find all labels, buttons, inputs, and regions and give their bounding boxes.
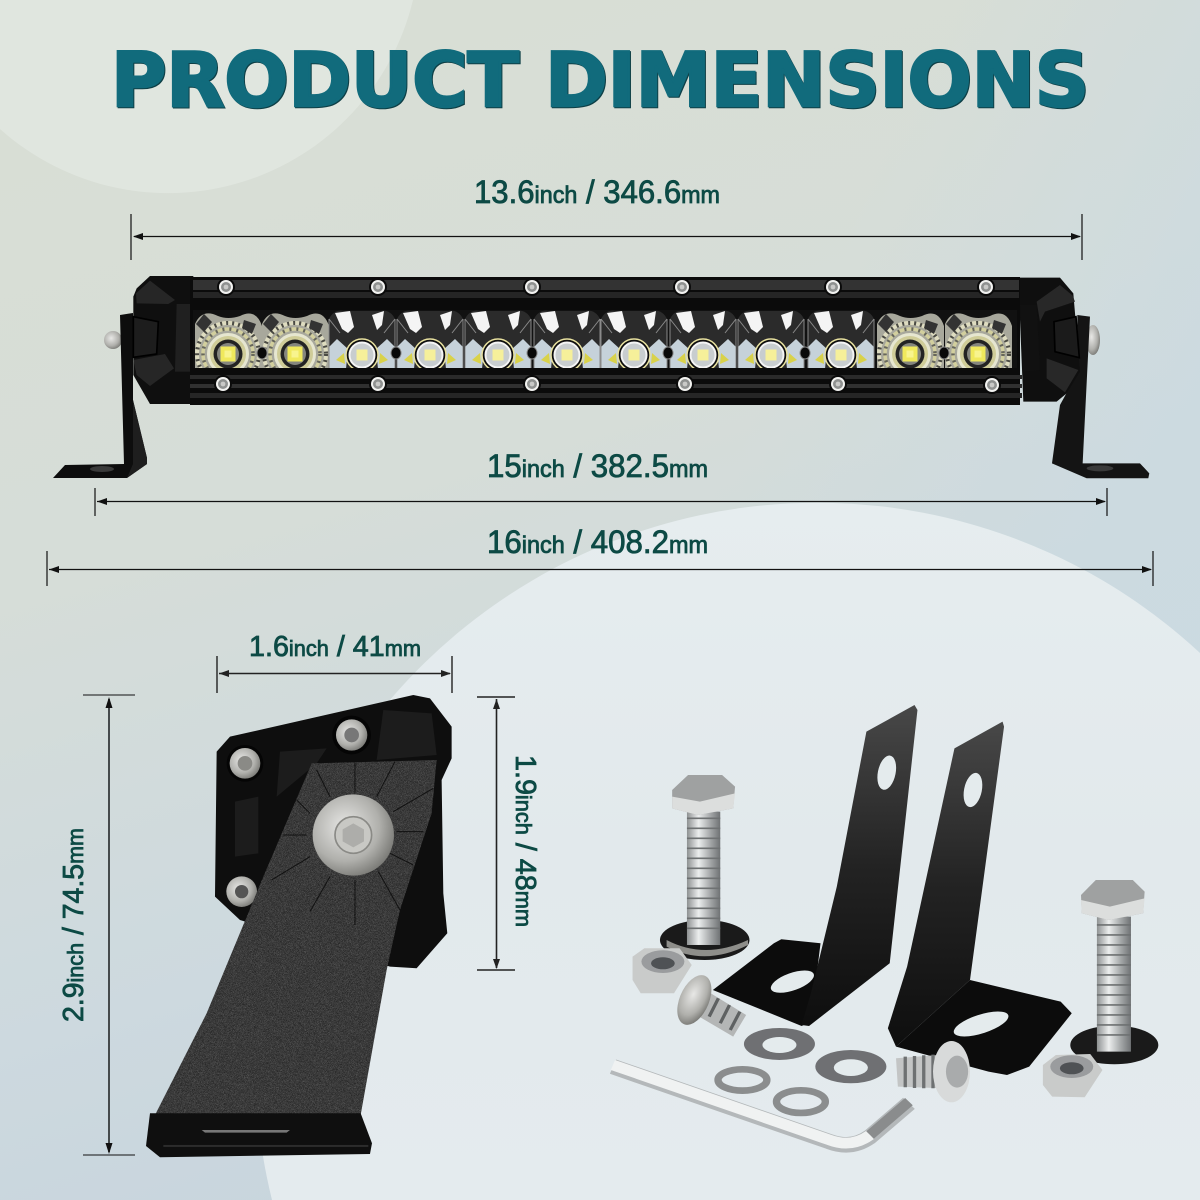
long bolt right	[1070, 880, 1158, 1064]
hex nut right	[1043, 1054, 1102, 1097]
title: PRODUCT DIMENSIONS	[111, 36, 1089, 124]
button screw left	[671, 971, 746, 1037]
bracket plate	[155, 760, 437, 1115]
rail	[190, 277, 1022, 405]
plate rays	[272, 762, 433, 925]
dimension: 1.9 inch housing height: 1.9 inch / 48 mm	[509, 755, 541, 927]
dimension: 1.6 inch bracket width: 1.6inch / 41mm	[249, 631, 421, 663]
spring washers	[718, 1069, 825, 1113]
rail screws	[214, 278, 1001, 394]
long bolt left	[660, 775, 749, 960]
lens strip	[195, 310, 1012, 368]
side view of mounted bracket	[146, 695, 452, 1157]
light bar	[53, 276, 1149, 478]
dimension: 13.6 inch overall bar width: 13.6inch / 346.6mm	[474, 174, 720, 210]
dimension: 2.9 inch bracket height: 2.9inch / 74.5mm	[58, 828, 90, 1022]
end cap left	[133, 276, 193, 404]
housing	[215, 695, 452, 968]
dimension: 1.6 inch bracket width	[217, 631, 452, 693]
dimension: 16 inch total width: 16inch / 408.2mm	[487, 524, 708, 560]
dimension: 1.9 inch housing height	[477, 697, 541, 970]
hex key	[613, 1065, 909, 1145]
mounting bracket left	[53, 313, 147, 478]
button screw right	[896, 1041, 970, 1102]
dimension: 15 inch mounting width	[95, 448, 1107, 516]
L bracket one	[713, 705, 917, 1026]
housing screws	[226, 716, 371, 907]
bolt	[313, 794, 394, 876]
dimension: 15 inch mounting width: 15inch / 382.5mm	[487, 448, 708, 484]
flat washers	[744, 1028, 886, 1083]
end cap right	[1018, 278, 1080, 402]
mounting bracket right	[1052, 315, 1149, 478]
foot	[146, 1113, 372, 1157]
hardware kit	[613, 705, 1158, 1145]
L bracket two	[888, 722, 1072, 1075]
dimension: 2.9 inch bracket height	[58, 695, 135, 1155]
hex nut left	[633, 948, 692, 993]
dimension: 13.6 inch overall bar width	[131, 174, 1082, 260]
dimension: 16 inch total width	[47, 524, 1153, 586]
